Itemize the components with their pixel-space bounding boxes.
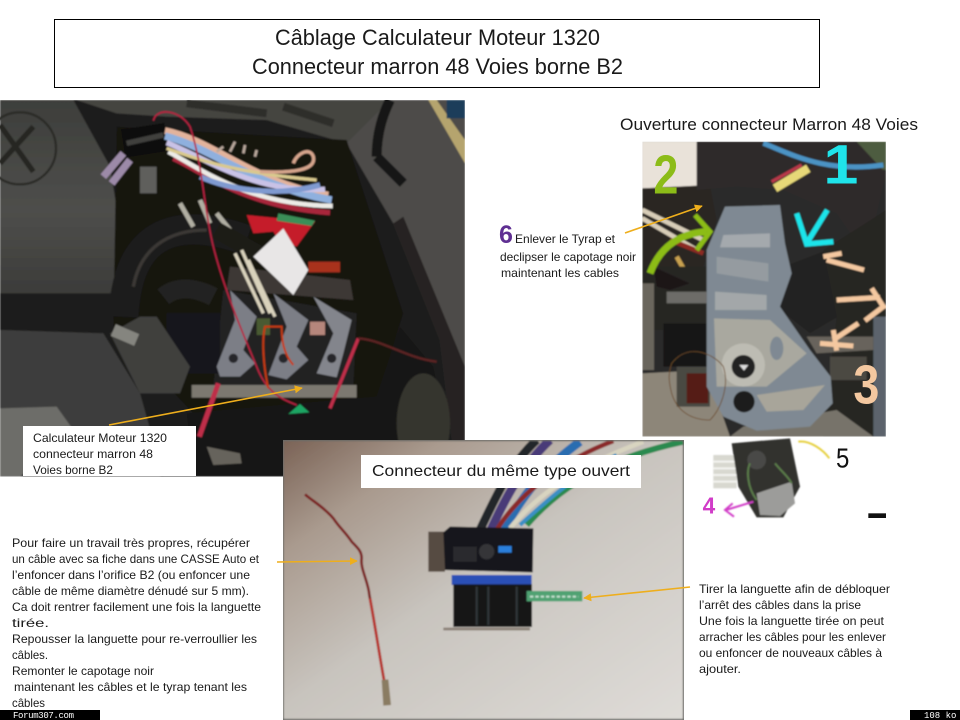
title box	[54, 20, 820, 88]
text block: pull the tab: Une fois la languette tirée on peut	[699, 614, 885, 628]
label: opened connector	[361, 455, 641, 488]
photo: small connector diagram	[703, 438, 886, 518]
text block: wiring instructions: Repousser la languette pour re-verroullier les	[12, 632, 257, 646]
text block: pull the tab: l’arrêt des câbles dans la prise	[699, 598, 861, 612]
callout: step 6 tyrap: maintenant les cables	[501, 266, 619, 280]
text block: wiring instructions: tirée.	[12, 616, 49, 630]
step numbers: 1	[823, 132, 858, 195]
callout: step 6 tyrap	[499, 221, 636, 280]
label: opened connector: Connecteur du même type ouvert	[372, 463, 631, 480]
caption: ECU: connecteur marron 48	[33, 447, 153, 461]
text block: wiring instructions: maintenant les câbles et le tyrap tenant les	[14, 680, 247, 694]
photo: engine bay with ECU	[0, 100, 465, 477]
title box: Connecteur marron 48 Voies borne B2	[252, 54, 623, 79]
text block: pull the tab: arracher les câbles pour les enlever	[699, 630, 886, 644]
callout: step 6 tyrap: 6	[499, 221, 513, 249]
engine bay ecu area	[227, 267, 353, 300]
step numbers: 2	[653, 143, 678, 205]
text block: wiring instructions: câbles.	[12, 648, 48, 662]
step numbers: 3	[853, 353, 879, 415]
arrow: tab pointer	[584, 587, 690, 598]
heading: opening the connector: Ouverture connecteur Marron 48 Voies	[620, 116, 918, 134]
arrow: tyrap pointer	[625, 206, 702, 233]
scale tag	[868, 513, 886, 518]
text block: pull the tab: Tirer la languette afin de débloquer	[699, 582, 890, 596]
step numbers	[653, 132, 879, 415]
caption: ECU: Calculateur Moteur 1320	[33, 431, 167, 445]
text block: wiring instructions: câble de même diamètre dénudé sur 5 mm).	[12, 584, 249, 598]
footer badge: forum	[0, 710, 100, 720]
text block: pull the tab: ou enfoncer de nouveaux câbles à	[699, 646, 882, 660]
text block: wiring instructions: Pour faire un travail très propres, récupérer	[12, 536, 250, 550]
caption: ECU	[23, 426, 196, 477]
text block: wiring instructions	[12, 536, 261, 710]
text block: wiring instructions: un câble avec sa fiche dans une CASSE Auto et	[12, 552, 260, 566]
caption: ECU: Voies borne B2	[33, 463, 113, 477]
photo: same type of connector opened	[283, 440, 684, 720]
title box: Câblage Calculateur Moteur 1320	[275, 25, 600, 50]
footer badge: file size	[910, 710, 960, 720]
text block: wiring instructions: l’enfoncer dans l’orifice B2 (ou enfoncer une	[12, 568, 250, 582]
callout: step 6 tyrap: Enlever le Tyrap et	[515, 232, 616, 246]
text block: wiring instructions: Remonter le capotage noir	[12, 664, 154, 678]
text block: wiring instructions: Ca doit rentrer facilement une fois la languette	[12, 600, 261, 614]
photo: connector lever with numbered steps	[642, 132, 886, 437]
step number 5: 5	[836, 442, 849, 473]
text block: wiring instructions: câbles	[12, 696, 45, 710]
arrow: ECU pointer	[109, 388, 302, 425]
step number 4: 4	[703, 492, 716, 518]
text block: pull the tab	[699, 582, 890, 676]
text block: pull the tab: ajouter.	[699, 662, 741, 676]
arrow: wire pointer	[277, 561, 357, 562]
callout: step 6 tyrap: declipser le capotage noir	[500, 250, 636, 264]
